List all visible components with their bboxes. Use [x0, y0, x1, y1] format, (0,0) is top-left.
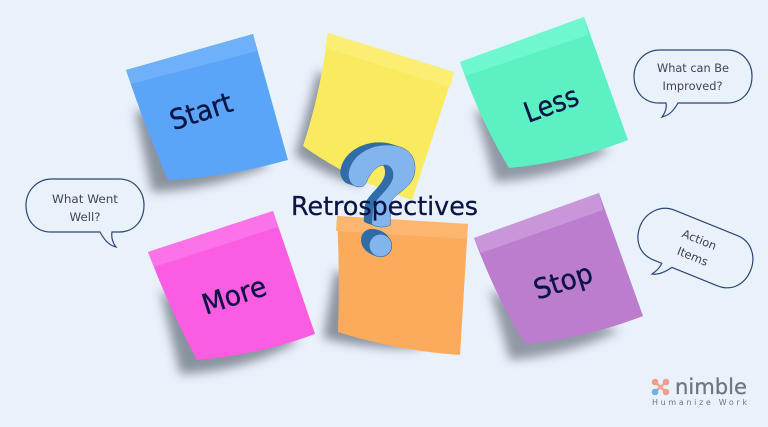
speech bubble: Action Items: Action: [680, 226, 719, 253]
speech bubble: What can Be Improved?: What can Be: [657, 61, 729, 75]
sticky note: Start: Start: [166, 86, 237, 137]
sticky note: yellow blank: [295, 33, 454, 200]
icon: 3D question mark: [340, 142, 415, 257]
sticky note: orange blank: [323, 216, 468, 355]
sticky note: Stop: Stop: [530, 257, 597, 306]
speech bubble: Action Items: Items: [675, 244, 710, 269]
speech bubble: Action Items: [625, 200, 761, 308]
sticky note: More: More: [198, 270, 271, 321]
sticky note: More: [148, 211, 315, 374]
sticky note: Stop: [474, 193, 643, 360]
sticky note: Less: Less: [519, 79, 583, 130]
sticky note: Less: [460, 17, 628, 182]
logo: nimble Humanize Work: nimble: [675, 375, 747, 399]
speech bubble: What can Be Improved?: [634, 50, 752, 117]
logo: nimble Humanize Work: Humanize Work: [652, 398, 747, 407]
speech bubble: What Went Well?: [26, 179, 144, 247]
title: Retrospectives: [291, 192, 478, 222]
logo: nimble Humanize Work: [652, 375, 747, 407]
speech bubble: What Went Well?: Well?: [70, 210, 100, 224]
speech bubble: What Went Well?: What Went: [52, 192, 118, 206]
sticky note: Start: [126, 34, 288, 192]
speech bubble: What can Be Improved?: Improved?: [662, 79, 722, 93]
